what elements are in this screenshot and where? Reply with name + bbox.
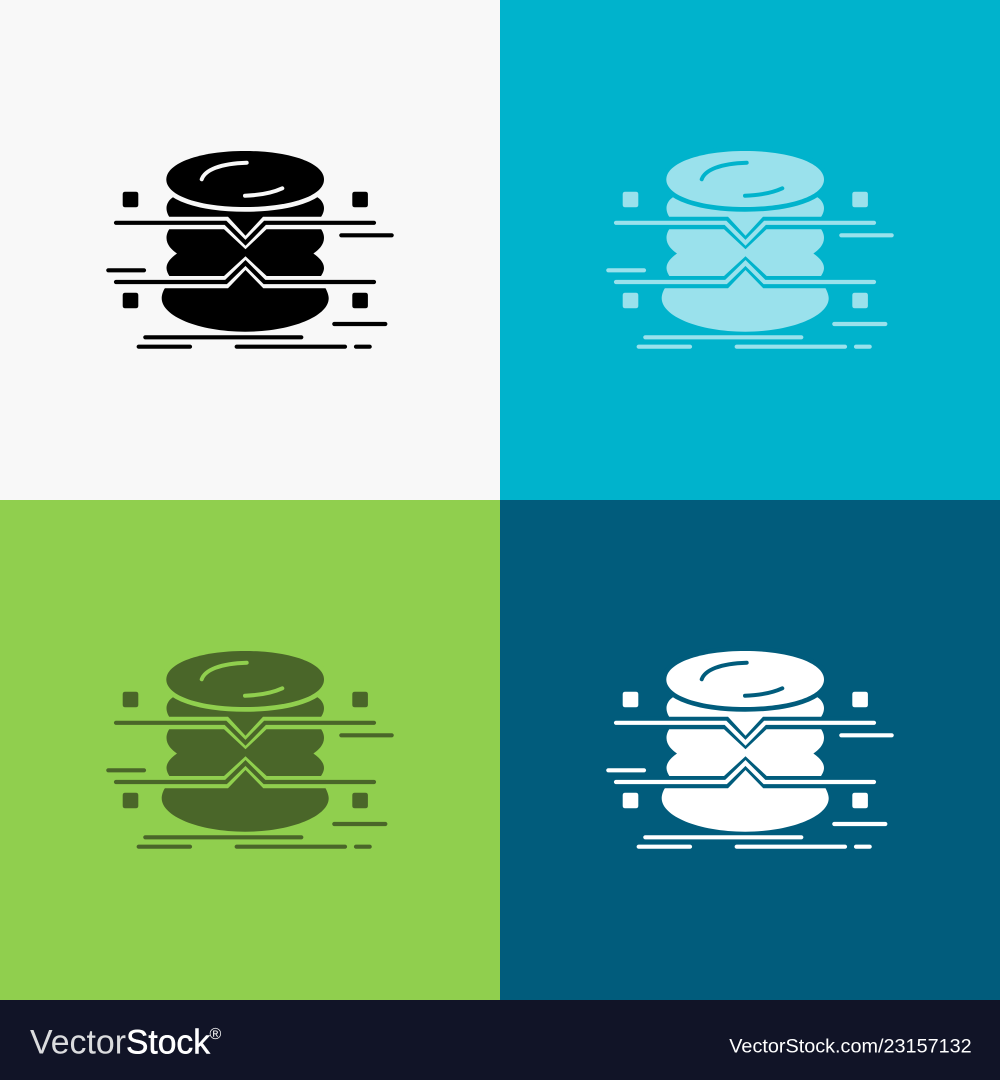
top disk bbox=[166, 651, 324, 707]
icon: data stack pale blue bbox=[608, 151, 892, 347]
disk highlights bbox=[702, 663, 782, 696]
panel: white background with black icon bbox=[0, 0, 500, 500]
small squares bbox=[623, 192, 868, 308]
panel: green background with dark green icon bbox=[0, 500, 500, 1000]
chevron lines bbox=[616, 723, 874, 782]
panel background: white bbox=[0, 0, 500, 500]
icon: data stack dark green bbox=[108, 651, 392, 847]
top disk bbox=[666, 151, 824, 207]
chevron gaps bbox=[140, 217, 350, 288]
disk highlights bbox=[202, 163, 282, 196]
accent dashes bbox=[108, 735, 392, 847]
panel background: teal bbox=[500, 0, 1000, 500]
chevron gaps bbox=[640, 217, 850, 288]
logo word: Stock: Stock bbox=[126, 1023, 211, 1061]
stack body bbox=[662, 696, 829, 832]
chevron lines bbox=[116, 723, 374, 782]
footer bar bbox=[0, 1000, 1000, 1080]
disk highlights bbox=[202, 663, 282, 696]
panel background: green bbox=[0, 500, 500, 1000]
accent dashes bbox=[608, 235, 892, 347]
top disk bbox=[166, 151, 324, 207]
icon: data stack black bbox=[108, 151, 392, 347]
stack body bbox=[162, 196, 329, 332]
registered mark: ® bbox=[210, 1026, 222, 1043]
disk highlights bbox=[702, 163, 782, 196]
accent dashes bbox=[108, 235, 392, 347]
panel background: dark blue bbox=[500, 500, 1000, 1000]
brand logo text bbox=[30, 1023, 222, 1061]
chevron lines bbox=[616, 223, 874, 282]
chevron gaps bbox=[640, 717, 850, 788]
icon: data stack white bbox=[608, 651, 892, 847]
panel: dark blue background with white icon bbox=[500, 500, 1000, 1000]
small squares bbox=[623, 692, 868, 808]
stack body bbox=[662, 196, 829, 332]
chevron lines bbox=[116, 223, 374, 282]
top disk bbox=[666, 651, 824, 707]
small squares bbox=[123, 192, 368, 308]
logo word: Vector: Vector bbox=[30, 1023, 126, 1061]
footer background bbox=[0, 1000, 1000, 1080]
chevron gaps bbox=[140, 717, 350, 788]
small squares bbox=[123, 692, 368, 808]
image id url: VectorStock.com/23157132 bbox=[729, 1037, 972, 1058]
stack body bbox=[162, 696, 329, 832]
panel: teal background with pale blue icon bbox=[500, 0, 1000, 500]
accent dashes bbox=[608, 735, 892, 847]
